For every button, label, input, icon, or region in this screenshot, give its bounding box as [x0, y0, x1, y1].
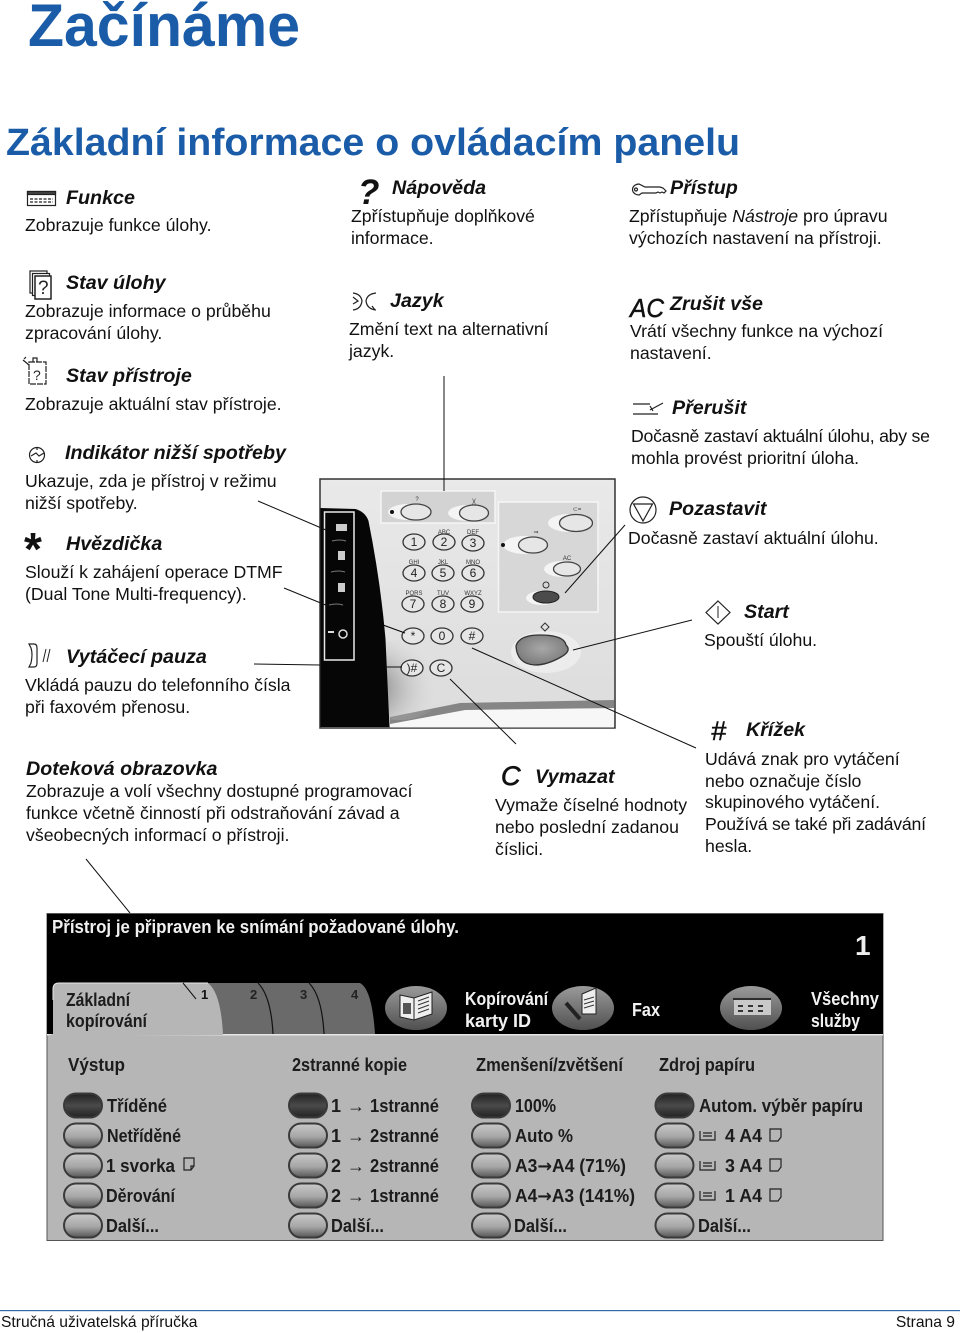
- all services label: [811, 989, 879, 1031]
- item: Nápověda: [351, 173, 535, 248]
- inactive tabs: 3: [300, 987, 307, 1002]
- icon: help: ?: [358, 173, 379, 212]
- item: Křížek: skupinového vytáčení.: [705, 792, 880, 812]
- keypad labels: )#: [407, 661, 418, 675]
- touch screen: [47, 914, 883, 1240]
- item: Funkce: Funkce: [66, 187, 135, 209]
- item: Vytáčecí pauza: Vkládá pauzu do telefonního čísla: [25, 675, 291, 695]
- two-sided options: →: [347, 1156, 365, 1176]
- item: Stav přístroje: Stav přístroje: [66, 365, 192, 387]
- keypad labels: ABC: [438, 530, 451, 536]
- reduce enlarge options: Další...: [514, 1216, 567, 1236]
- two-sided options: 1stranné: [370, 1096, 439, 1116]
- output options: Děrování: [106, 1186, 176, 1206]
- icon: job status: [30, 271, 51, 299]
- paper supply options: Další...: [698, 1216, 751, 1236]
- keypad: [401, 534, 484, 676]
- copy count: 1: [855, 930, 871, 961]
- item: Zrušit vše: Zrušit vše: [669, 293, 763, 315]
- two-sided options: →: [347, 1126, 365, 1146]
- keypad labels: *: [411, 629, 416, 643]
- item: Vytáčecí pauza: Vytáčecí pauza: [66, 646, 207, 668]
- keypad labels: 6: [470, 566, 477, 580]
- item: Křížek: hesla.: [705, 836, 752, 856]
- reduce enlarge options: Auto %: [515, 1126, 573, 1146]
- column headings: [68, 1055, 755, 1075]
- keypad labels: PQRS: [405, 591, 423, 597]
- section heading: Základní informace o ovládacím panelu: [6, 122, 740, 164]
- paper supply options: Autom. výběr papíru: [699, 1096, 863, 1116]
- item: Stav úlohy: Stav úlohy: [66, 272, 167, 294]
- item: Přístup: Přístup: [670, 177, 738, 199]
- item: Pozastavit: [628, 497, 879, 548]
- item: Indikátor nižší spotřeby: [25, 442, 287, 513]
- inactive tabs: 2: [250, 987, 257, 1002]
- column headings: Výstup: [68, 1055, 125, 1075]
- icon: job status: ?: [38, 278, 49, 299]
- reduce enlarge options: [514, 1096, 635, 1236]
- paper supply options: 3 A4: [725, 1156, 762, 1176]
- keypad labels: GHI: [409, 560, 420, 566]
- two-sided options: 2: [331, 1186, 341, 1206]
- item: Stav přístroje: [23, 357, 282, 414]
- item: Jazyk: jazyk.: [348, 341, 394, 361]
- start button: [511, 623, 581, 673]
- item: Vytáčecí pauza: [25, 644, 291, 717]
- item: Křížek: [705, 716, 926, 856]
- item: Indikátor nižší spotřeby: Ukazuje, zda je přístroj v režimu: [25, 471, 277, 491]
- two-sided options: [331, 1096, 439, 1236]
- fax label: Fax: [632, 1000, 660, 1020]
- item: Start: [704, 601, 817, 650]
- icon: functions: [28, 192, 56, 206]
- status message: Přístroj je připraven ke snímání požadované úlohy.: [52, 917, 459, 937]
- item: Křížek: Křížek: [746, 719, 806, 741]
- keypad labels: DEF: [467, 530, 479, 536]
- item: Dotyková obrazovka: funkce včetně činností při odstraňování závad a: [26, 803, 400, 823]
- reduce enlarge options: A4→A3 (141%): [515, 1186, 635, 1207]
- item: Přerušit: Přerušit: [672, 397, 748, 419]
- output options: Netříděné: [107, 1126, 181, 1146]
- item: Vytáčecí pauza: při faxovém přenosu.: [25, 697, 190, 717]
- item: Hvězdička: (Dual Tone Multi-frequency).: [25, 584, 247, 604]
- help and language buttons box: )(: [472, 499, 476, 505]
- keypad labels: 1: [411, 535, 418, 549]
- column headings: Zdroj papíru: [659, 1055, 755, 1075]
- item: Pozastavit: Pozastavit: [669, 498, 768, 520]
- item: Indikátor nižší spotřeby: nižší spotřeby.: [25, 493, 138, 513]
- item: Dotyková obrazovka: Doteková obrazovka: [26, 758, 218, 780]
- item: Hvězdička: [24, 523, 283, 604]
- icon: stop: [630, 497, 656, 523]
- column headings: 2stranné kopie: [292, 1055, 407, 1075]
- item: Nápověda: Nápověda: [392, 177, 486, 199]
- keypad labels: MNO: [466, 560, 480, 566]
- item: Vymazat: [495, 761, 687, 859]
- panel: control panel photo: [320, 479, 615, 728]
- item: Funkce: [25, 187, 211, 235]
- icon: C: C: [501, 761, 521, 791]
- icon: start: [706, 601, 730, 624]
- item: Pozastavit: Dočasně zastaví aktuální úlohu.: [628, 528, 879, 548]
- inactive tabs: [205, 983, 375, 1034]
- item: Stav úlohy: Zobrazuje informace o průběhu: [25, 301, 271, 321]
- item: Stav úlohy: zpracování úlohy.: [25, 323, 162, 343]
- icon: dial pause: [29, 644, 50, 667]
- item: Jazyk: [348, 290, 549, 361]
- item: Křížek: Udává znak pro vytáčení: [705, 749, 900, 769]
- item: Křížek: nebo označuje číslo: [705, 771, 862, 791]
- footer: Strana 9: [896, 1314, 955, 1331]
- item: Dotyková obrazovka: [26, 758, 412, 845]
- option buttons: [64, 1094, 694, 1238]
- item: Hvězdička: Slouží k zahájení operace DTMF: [25, 562, 283, 582]
- footer: Stručná uživatelská příručka: [1, 1314, 198, 1331]
- keypad labels: 3: [470, 536, 477, 550]
- icon: AC: AC: [628, 293, 664, 323]
- icon: machine status: [23, 357, 46, 384]
- two-sided options: 2stranné: [370, 1156, 439, 1176]
- keypad labels: #: [469, 629, 476, 643]
- two-sided options: 1: [331, 1096, 341, 1116]
- item: Přerušit: mohla provést prioritní úloha.: [631, 448, 859, 468]
- keypad labels: C: [437, 661, 446, 675]
- icon: asterisk: *: [24, 523, 42, 575]
- all services icon button: [720, 986, 782, 1030]
- item: Jazyk: Změní text na alternativní: [349, 319, 549, 339]
- output options: [106, 1096, 194, 1236]
- item: Zrušit vše: [628, 293, 883, 363]
- keypad labels: [405, 530, 482, 675]
- output options: Tříděné: [107, 1096, 167, 1116]
- icon: key: [632, 184, 666, 195]
- icon: language: [353, 293, 376, 310]
- ID copy label: karty ID: [465, 1011, 531, 1031]
- keypad labels: WXYZ: [464, 591, 482, 597]
- keypad labels: 4: [411, 566, 418, 580]
- keypad labels: JKL: [438, 560, 449, 566]
- black header: [47, 914, 883, 1034]
- two-sided options: 1stranné: [370, 1186, 439, 1206]
- ID card icon button: [385, 986, 447, 1030]
- reduce enlarge options: 100%: [515, 1096, 556, 1116]
- keypad labels: 0: [439, 629, 446, 643]
- leader lines: [86, 376, 696, 913]
- item: Jazyk: Jazyk: [390, 290, 445, 312]
- footer: [0, 1310, 960, 1331]
- output options: 1 svorka: [106, 1156, 176, 1176]
- help and language buttons box: [381, 491, 495, 523]
- reduce enlarge options: A3→A4 (71%): [515, 1156, 626, 1177]
- right button box: ⊂=: [573, 507, 582, 513]
- item: Dotyková obrazovka: všeobecných informací o přístroji.: [26, 825, 289, 845]
- right button box: ⇒: [533, 530, 539, 536]
- item: Vymazat: nebo poslední zadanou: [495, 817, 679, 837]
- item: Křížek: Používá se také při zadávání: [705, 814, 926, 834]
- keypad labels: 7: [410, 597, 417, 611]
- all services label: služby: [811, 1011, 860, 1031]
- item: Vymazat: Vymazat: [535, 766, 616, 788]
- item: Zrušit vše: Vrátí všechny funkce na výchozí: [630, 321, 883, 341]
- two-sided options: 2stranné: [370, 1126, 439, 1146]
- black bezel: [320, 508, 390, 727]
- keypad labels: TUV: [437, 591, 449, 597]
- item: Funkce: Zobrazuje funkce úlohy.: [25, 215, 211, 235]
- help and language buttons box: ?: [415, 497, 419, 503]
- paper supply options: 1 A4: [725, 1186, 762, 1206]
- keypad labels: 9: [469, 597, 476, 611]
- right button box: [498, 502, 598, 612]
- two-sided options: 1: [331, 1126, 341, 1146]
- icon: interrupt: [633, 403, 663, 414]
- item: Nápověda: informace.: [351, 228, 434, 248]
- keypad labels: 5: [440, 566, 447, 580]
- two-sided options: Další...: [331, 1216, 384, 1236]
- keypad labels: 2: [441, 535, 448, 549]
- item: Přerušit: [631, 397, 930, 468]
- active tab: Základní: [66, 990, 131, 1010]
- item: Start: Spouští úlohu.: [704, 630, 817, 650]
- two-sided options: →: [347, 1186, 365, 1206]
- item: Přerušit: Dočasně zastaví aktuální úlohu, aby se: [631, 426, 930, 446]
- active tab: 1: [201, 987, 208, 1002]
- icon: power saver: [30, 447, 44, 463]
- item: Přístup: Zpřístupňuje Nástroje pro úpravu: [629, 206, 888, 226]
- ID copy label: [465, 989, 549, 1031]
- keypad labels: 8: [440, 597, 447, 611]
- item: Hvězdička: Hvězdička: [66, 533, 162, 555]
- paper supply options: 4 A4: [725, 1126, 762, 1146]
- item: Start: Start: [744, 601, 790, 623]
- column headings: Zmenšení/zvětšení: [476, 1055, 624, 1075]
- item: Stav přístroje: Zobrazuje aktuální stav přístroje.: [25, 394, 282, 414]
- ID copy label: Kopírování: [465, 989, 549, 1009]
- fax icon button: [552, 986, 614, 1030]
- icon: hash: #: [711, 716, 727, 746]
- panel lower edge: [390, 708, 614, 728]
- item: Vymazat: číslici.: [495, 839, 543, 859]
- item: Zrušit vše: nastavení.: [630, 343, 712, 363]
- icon: machine status: ?: [33, 367, 41, 383]
- inactive tabs: 4: [351, 987, 359, 1002]
- item: Přístup: výchozích nastavení na přístroji.: [629, 228, 882, 248]
- active tab: kopírování: [66, 1011, 148, 1031]
- item: Stav úlohy: [25, 271, 271, 343]
- two-sided options: →: [347, 1096, 365, 1116]
- active tab: [47, 983, 223, 1036]
- output options: Další...: [106, 1216, 159, 1236]
- item: Přístup: [629, 177, 888, 248]
- bezel white frame: [324, 512, 354, 660]
- item: Dotyková obrazovka: Zobrazuje a volí všechny dostupné programovací: [26, 781, 412, 801]
- item: Nápověda: Zpřístupňuje doplňkové: [351, 206, 535, 226]
- right button box: AC: [563, 556, 572, 562]
- bezel shadow: [350, 640, 450, 720]
- all services label: Všechny: [811, 989, 879, 1009]
- item: Indikátor nižší spotřeby: Indikátor nižší spotřeby: [65, 442, 287, 464]
- item: Vymazat: Vymaže číselné hodnoty: [495, 795, 687, 815]
- two-sided options: 2: [331, 1156, 341, 1176]
- paper supply options: [698, 1096, 863, 1236]
